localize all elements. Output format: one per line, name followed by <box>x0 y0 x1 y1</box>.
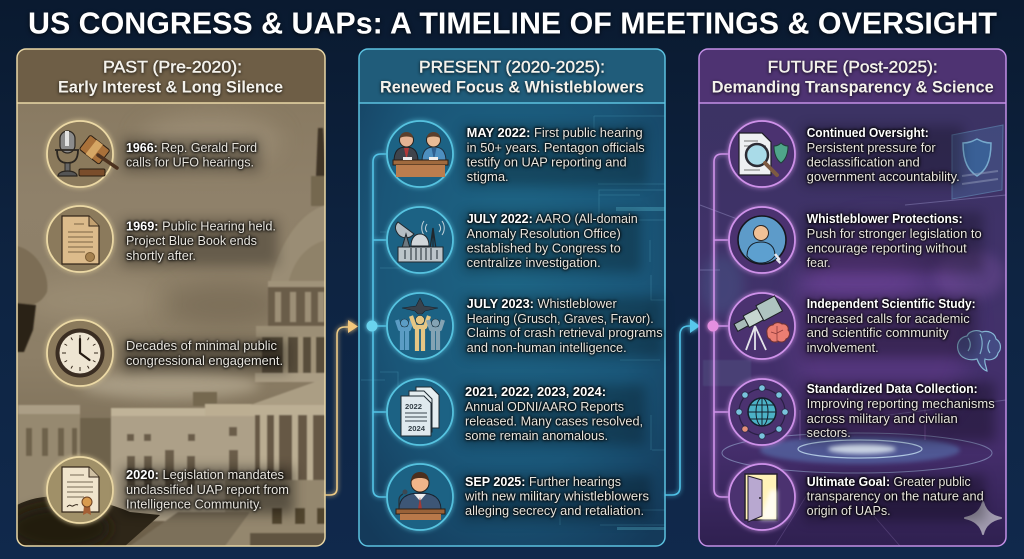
text block: whistleblower protections <box>803 212 983 272</box>
text block: independent study: Independent Scientific Study: <box>807 297 976 311</box>
text block: continued oversight: Persistent pressure for <box>807 141 936 155</box>
panel border <box>359 49 665 546</box>
panel heading <box>712 59 994 96</box>
text block: July 2022: centralize investigation. <box>467 256 601 270</box>
panel body <box>359 49 665 546</box>
text block: July 2022: JULY 2022: AARO (All-domain <box>467 212 638 226</box>
text block: Sep 2025: alleging secrecy and retaliation. <box>465 504 644 518</box>
text block: ultimate goal: transparency on the nature and <box>807 490 984 504</box>
timeline line <box>708 154 729 497</box>
text block: standardized data: sectors. <box>807 426 851 440</box>
icon: two officials at a desk <box>387 121 453 187</box>
text block: Sep 2025 <box>461 475 651 521</box>
text block: independent study: and scientific community <box>807 326 949 340</box>
text block: whistleblower protections: Push for stronger legislation to <box>807 227 982 241</box>
icon: parchment document <box>47 206 113 272</box>
text block: May 2022: testify on UAP reporting and <box>467 156 627 170</box>
faint HUD background <box>361 116 665 530</box>
text block: July 2023: JULY 2023: Whistleblower <box>467 297 617 311</box>
text block: 1966: calls for UFO hearings. <box>126 156 254 170</box>
icon: stack of annual reports: 2024 <box>408 424 426 433</box>
text block: ultimate goal: Ultimate Goal: Greater public <box>807 475 971 489</box>
text block: 2020: Intelligence Community. <box>126 498 262 512</box>
text block: May 2022: stigma. <box>467 170 509 184</box>
text block: May 2022 <box>463 126 647 186</box>
text block: continued oversight <box>803 126 963 186</box>
icon: telescope and brain <box>729 293 795 359</box>
icon: document, magnifier and shield <box>729 121 795 187</box>
panel body <box>699 49 1006 546</box>
holographic brain <box>958 331 1000 371</box>
text block: annual reports: released. Many cases resolved, <box>465 414 643 428</box>
panel heading: PRESENT (2020-2025): <box>419 59 605 77</box>
text block: July 2022 <box>463 212 641 272</box>
text block: July 2023 <box>463 297 663 357</box>
text block: annual reports: 2021, 2022, 2023, 2024: <box>465 385 606 399</box>
panel border <box>17 49 325 546</box>
panel heading: Early Interest & Long Silence <box>58 78 283 96</box>
text block: whistleblower protections: encourage reporting without <box>807 242 967 256</box>
text block: May 2022: in 50+ years. Pentagon officials <box>467 141 645 155</box>
glowing platform <box>722 433 992 473</box>
text block: Sep 2025: SEP 2025: Further hearings <box>465 475 621 489</box>
text block: continued oversight: Continued Oversight: <box>807 126 929 140</box>
capitol building <box>18 414 80 504</box>
holographic shield <box>952 125 1003 199</box>
text block: whistleblower protections: fear. <box>807 256 831 270</box>
text block: 1966: 1966: Rep. Gerald Ford <box>126 141 257 155</box>
timeline line <box>79 187 81 457</box>
text block: Sep 2025: with new military whistleblowers <box>464 490 649 504</box>
icon: stack of annual reports: 2022 <box>405 402 422 411</box>
text block: independent study: involvement. <box>807 341 879 355</box>
text block: continued oversight: government accountability. <box>807 170 960 184</box>
text block: whistleblower protections: Whistleblower Protections: <box>807 212 963 226</box>
text block: July 2022: Anomaly Resolution Office) <box>467 227 621 241</box>
icon: stack of annual reports <box>387 379 453 445</box>
text block: standardized data: across military and civilian <box>807 412 958 426</box>
watermark star <box>965 502 1001 534</box>
foreground trees <box>17 496 160 546</box>
panel header band <box>359 49 665 103</box>
panel border <box>699 49 1006 546</box>
panel heading: Demanding Transparency & Science <box>712 78 994 96</box>
text block: standardized data: Standardized Data Collection: <box>807 382 978 396</box>
text block: ultimate goal: origin of UAPs. <box>807 504 891 518</box>
text block: 2020: 2020: Legislation mandates <box>126 468 284 482</box>
panel heading <box>58 59 283 96</box>
text block: independent study: Increased calls for academic <box>807 312 970 326</box>
capitol sepia background <box>18 104 324 546</box>
text block: 2020 <box>122 468 294 514</box>
text block: annual reports: some remain anomalous. <box>465 429 608 443</box>
text block: 1969: shortly after. <box>126 249 196 263</box>
icon: protected person <box>729 207 795 273</box>
text block: May 2022: MAY 2022: First public hearing <box>467 126 643 140</box>
text block: July 2022: established by Congress to <box>467 242 621 256</box>
text block: July 2023: Claims of crash retrieval programs <box>467 326 663 340</box>
icon: open glowing door <box>729 464 795 530</box>
text block: 1969: 1969: Public Hearing held. <box>126 220 276 234</box>
icon: capitol with satellite dish and antenna <box>387 207 453 273</box>
statue and dome <box>316 128 326 176</box>
panel heading: FUTURE (Post-2025): <box>768 59 938 77</box>
panel heading <box>380 59 644 96</box>
panel header band <box>17 49 325 103</box>
text block: 1969 <box>122 220 278 266</box>
text block: standardized data: Improving reporting mechanisms <box>807 397 995 411</box>
text block: July 2023: and non-human intelligence. <box>467 341 627 355</box>
icon: clock <box>47 320 113 386</box>
panel heading: Renewed Focus & Whistleblowers <box>380 78 644 96</box>
arrow: past to present <box>325 320 358 495</box>
text block: annual reports <box>461 385 645 445</box>
text block: 1966 <box>122 138 260 172</box>
text block: 2020: unclassified UAP report from <box>126 483 289 497</box>
panel: past <box>10 49 326 550</box>
holographic background <box>700 125 1006 546</box>
icon: certificate <box>47 457 113 523</box>
icon: whistleblower at podium <box>387 464 453 530</box>
title: US CONGRESS & UAPs: A TIMELINE OF MEETINGS & OVERSIGHT <box>28 6 997 40</box>
panel: present <box>359 49 665 546</box>
left distant dome <box>17 246 47 305</box>
panel heading: PAST (Pre-2020): <box>103 59 242 77</box>
timeline line <box>366 154 387 497</box>
text block: July 2023: Hearing (Grusch, Graves, Fravor). <box>467 312 654 326</box>
text block: ultimate goal <box>803 475 985 521</box>
text block: decades: congressional engagement. <box>126 354 283 368</box>
arrow: present to future <box>665 319 700 495</box>
icon: aircraft and raised-arm figures <box>387 293 453 359</box>
icon: microphone and gavel <box>47 121 117 187</box>
panel: future <box>699 49 1006 546</box>
text block: decades <box>122 339 288 372</box>
text block: annual reports: Annual ODNI/AARO Reports <box>465 400 624 414</box>
icon: globe and data network <box>729 379 795 445</box>
text block: standardized data <box>803 382 995 442</box>
panel header band <box>699 49 1006 103</box>
text block: continued oversight: declassification and <box>807 156 920 170</box>
text block: 1969: Project Blue Book ends <box>126 234 257 248</box>
text block: decades: Decades of minimal public <box>126 339 277 353</box>
text block: independent study <box>803 297 977 357</box>
